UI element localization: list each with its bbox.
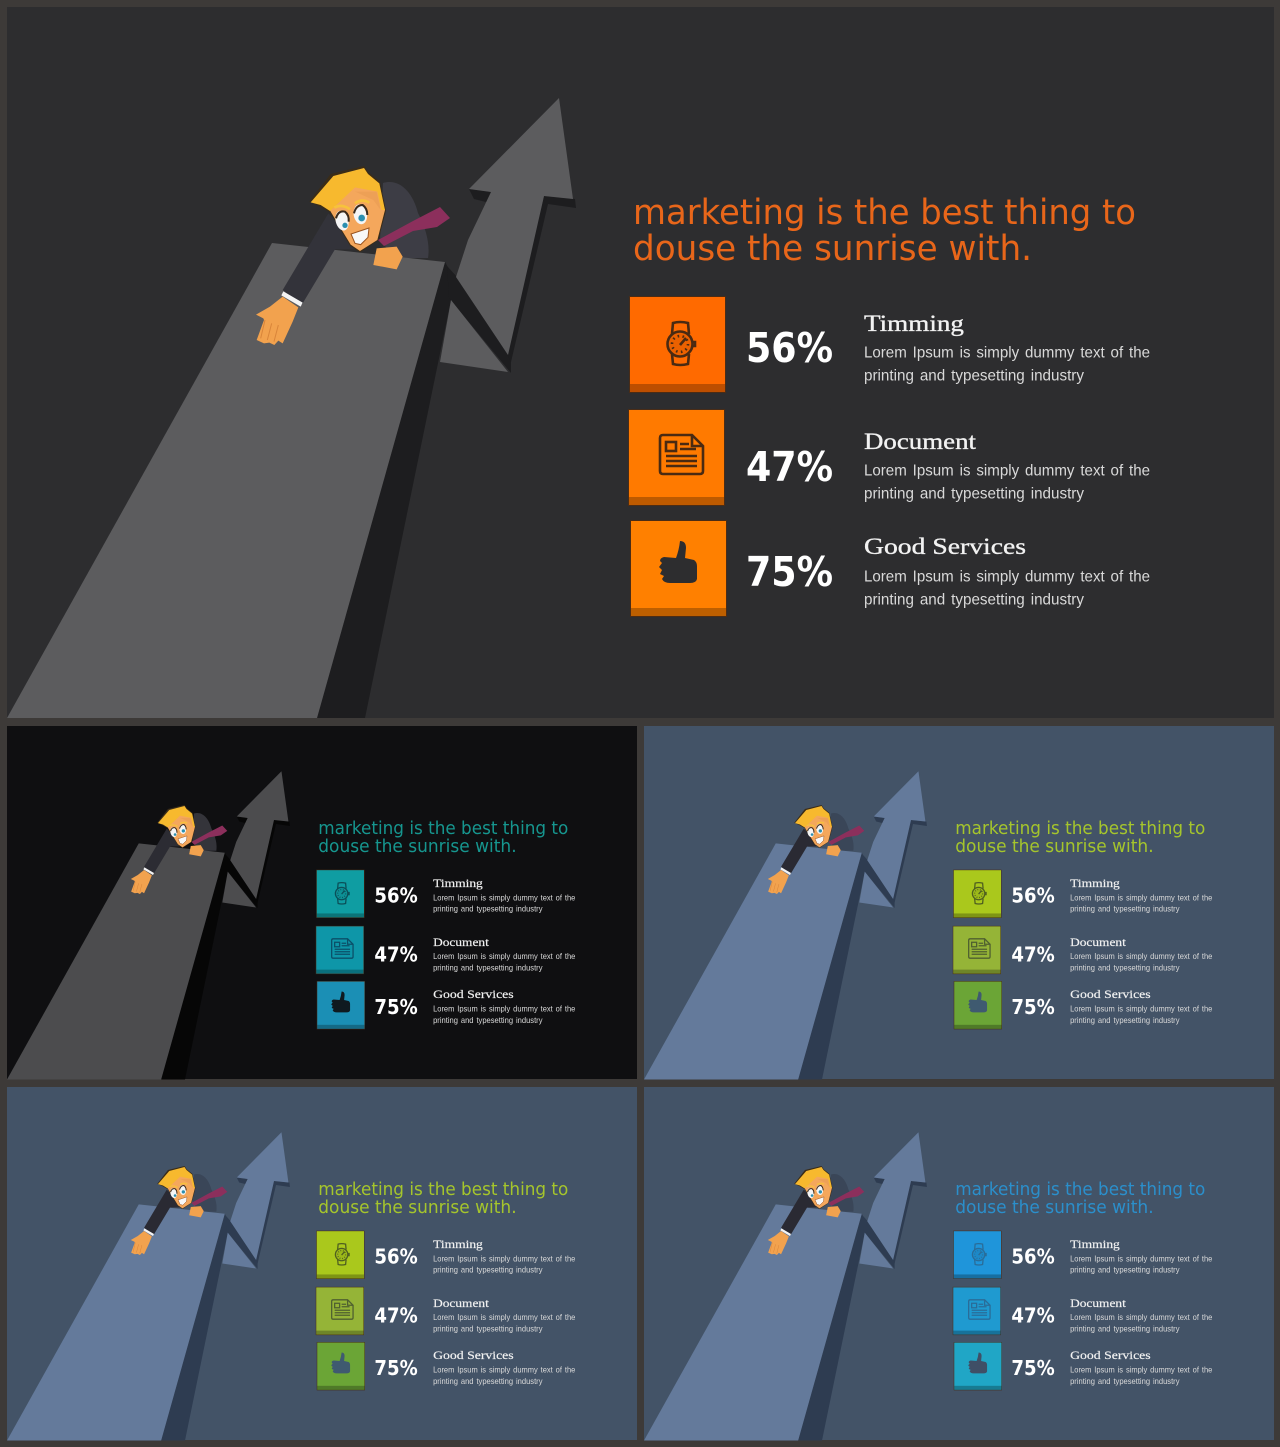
metric rows: 56% [1011,884,1055,908]
metric rows: 75% [1011,995,1055,1019]
percentage 75%: 75% [746,548,833,596]
illustration [644,1132,927,1441]
metric rows: Lorem Ipsum is simply dummy text of the [1070,952,1213,961]
metric rows: printing and typesetting industry [1070,963,1180,972]
metric rows: Good Services [1070,988,1151,1001]
description [864,568,1150,608]
title: douse the sunrise with. [955,837,1154,857]
metric rows: Document [433,1297,490,1310]
metric rows: Lorem Ipsum is simply dummy text of the [1070,893,1213,902]
description: printing and typesetting industry [864,486,1084,502]
metric rows: 56% [374,1245,418,1269]
metric rows: Lorem Ipsum is simply dummy text of the [433,1313,576,1322]
panel: blue lime variant bottom [7,1087,637,1441]
description: Lorem Ipsum is simply dummy text of the [864,462,1150,480]
panel: blue lime variant top [644,726,1274,1080]
title: marketing is the best thing to [318,1180,568,1200]
title [318,819,568,857]
title: marketing is the best thing to [955,819,1205,839]
metric rows: Timming [433,877,483,890]
metric rows: printing and typesetting industry [433,1016,543,1025]
title: marketing is the best thing to [955,1180,1205,1200]
metric rows: printing and typesetting industry [433,1324,543,1333]
illustration [7,771,290,1080]
metric rows: Document [433,936,490,949]
metric rows: printing and typesetting industry [1070,1016,1180,1025]
metric rows: Timming [1070,877,1120,890]
description [864,344,1150,384]
panel: black teal variant [7,726,637,1080]
metric rows: 56% [1011,1245,1055,1269]
title: douse the sunrise with. [955,1198,1154,1218]
metric rows: Lorem Ipsum is simply dummy text of the [433,1254,576,1263]
row: Document [628,409,1150,506]
row: Good Services [630,520,1150,617]
metric rows: 47% [1011,943,1055,967]
metric rows: Lorem Ipsum is simply dummy text of the [1070,1005,1213,1014]
description: printing and typesetting industry [864,592,1084,608]
metric rows: Lorem Ipsum is simply dummy text of the [433,1005,576,1014]
title: douse the sunrise with. [318,837,517,857]
metric rows: printing and typesetting industry [1070,1324,1180,1333]
metric rows: Timming [1070,1238,1120,1251]
metric rows: Lorem Ipsum is simply dummy text of the [433,952,576,961]
illustration [644,771,927,1080]
description: printing and typesetting industry [864,368,1084,384]
metric rows: 75% [1011,1356,1055,1380]
metric rows: Lorem Ipsum is simply dummy text of the [433,893,576,902]
title: marketing is the best thing to [633,193,1136,233]
title [633,193,1136,269]
metric rows: Lorem Ipsum is simply dummy text of the [1070,1313,1213,1322]
metric rows: printing and typesetting industry [433,963,543,972]
metric rows: 47% [374,1304,418,1328]
icon: watch [629,296,726,393]
metric rows: Timming [433,1238,483,1251]
metric rows: 56% [374,884,418,908]
metric rows: printing and typesetting industry [1070,905,1180,914]
metric rows: 47% [1011,1304,1055,1328]
icon: document [628,409,725,506]
metric rows: Document [1070,936,1127,949]
metric rows: printing and typesetting industry [433,1377,543,1386]
metric rows: Lorem Ipsum is simply dummy text of the [1070,1254,1213,1263]
metric rows: printing and typesetting industry [433,1266,543,1275]
metric rows: Document [1070,1297,1127,1310]
percentage 56%: 56% [746,324,833,372]
metric rows: printing and typesetting industry [433,905,543,914]
title [955,1180,1205,1218]
metric rows [953,870,1213,1029]
metric rows: 75% [374,1356,418,1380]
metric rows: Lorem Ipsum is simply dummy text of the [1070,1366,1213,1375]
title: marketing is the best thing to [318,819,568,839]
metric rows: Lorem Ipsum is simply dummy text of the [433,1366,576,1375]
heading: Document [864,429,977,455]
metric rows: Good Services [1070,1349,1151,1362]
percentage 47%: 47% [746,443,833,491]
panel: main dark slide [7,7,1274,718]
description [864,462,1150,502]
illustration [7,1132,290,1441]
icon: thumbs up [630,520,727,617]
panel: blue sky variant [644,1087,1274,1441]
row: Timming [629,296,1150,393]
metric rows [316,1231,576,1390]
heading: Good Services [864,534,1026,560]
title [955,819,1205,857]
metric rows: printing and typesetting industry [1070,1377,1180,1386]
title [318,1180,568,1218]
metric rows: printing and typesetting industry [1070,1266,1180,1275]
heading: Timming [864,311,964,337]
description: Lorem Ipsum is simply dummy text of the [864,568,1150,586]
metric rows [953,1231,1213,1390]
metric rows: Good Services [433,1349,514,1362]
description: Lorem Ipsum is simply dummy text of the [864,344,1150,362]
title: douse the sunrise with. [633,229,1032,269]
metric rows [316,870,576,1029]
metric rows: Good Services [433,988,514,1001]
illustration: businessman on rising arrow [7,98,576,718]
title: douse the sunrise with. [318,1198,517,1218]
metric rows: 47% [374,943,418,967]
metric rows: 75% [374,995,418,1019]
